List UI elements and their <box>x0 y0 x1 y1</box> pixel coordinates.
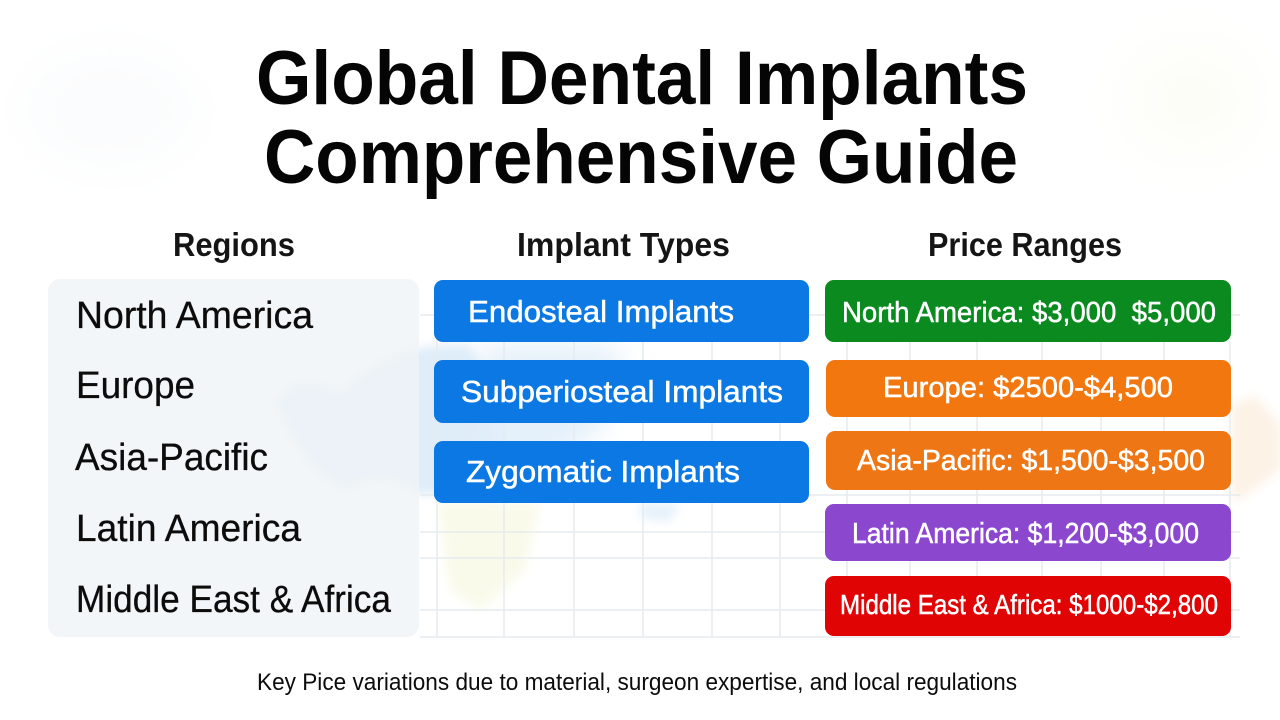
implant: endosteal: Endosteal Implants <box>468 294 734 329</box>
panel: regions <box>48 279 419 637</box>
price: Latin America <box>825 504 1231 561</box>
region: Europe: Europe <box>76 365 195 407</box>
title <box>256 36 1028 200</box>
price: North America <box>825 280 1231 342</box>
implant: subperiosteal <box>434 360 809 423</box>
region: Asia-Pacific: Asia-Pacific <box>75 437 268 479</box>
price: Middle East and Africa <box>825 576 1231 636</box>
price: Middle East and Africa: Middle East & Africa: $1000-$2,800 <box>840 589 1218 620</box>
implant: subperiosteal: Subperiosteal Implants <box>461 374 783 409</box>
panel: price ranges <box>825 280 1231 636</box>
heading: price ranges: Price Ranges <box>928 226 1122 263</box>
price: Asia-Pacific: Asia-Pacific: $1,500-$3,500 <box>857 445 1205 477</box>
implant: endosteal <box>434 280 809 342</box>
price: Asia-Pacific <box>826 431 1231 490</box>
price: North America: North America: $3,000 $5,000 <box>842 297 1216 329</box>
region: Middle East and Africa: Middle East & Africa <box>76 579 392 621</box>
heading: implant types: Implant Types <box>517 226 730 263</box>
price: Latin America: Latin America: $1,200-$3,000 <box>852 518 1199 550</box>
footer note: Key Pice variations due to material, surgeon expertise, and local regulations <box>257 669 1017 696</box>
region: North America: North America <box>76 295 314 337</box>
title: Comprehensive Guide <box>264 115 1018 200</box>
implant: zygomatic <box>434 441 809 503</box>
heading: regions: Regions <box>173 226 295 263</box>
implant: zygomatic: Zygomatic Implants <box>466 454 740 489</box>
price: Europe <box>826 360 1231 417</box>
region: Latin America: Latin America <box>76 508 302 550</box>
title: Global Dental Implants <box>256 36 1028 121</box>
panel: implant types <box>434 280 809 503</box>
price: Europe: Europe: $2500-$4,500 <box>883 372 1173 404</box>
